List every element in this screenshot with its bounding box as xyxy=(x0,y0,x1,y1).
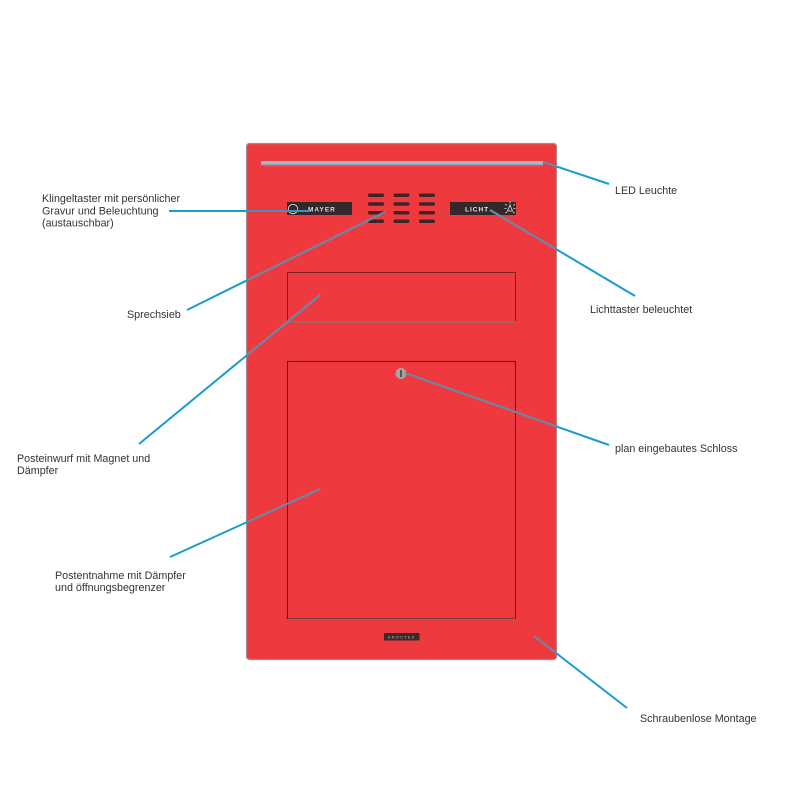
label: Klingeltaster: Gravur und Beleuchtung xyxy=(42,206,159,218)
brand plate xyxy=(384,633,420,640)
light button: LICHT xyxy=(465,206,489,214)
speaker grille xyxy=(368,194,435,223)
label: Postentnahme: und öffnungsbegrenzer xyxy=(55,582,166,594)
label: LED Leuchte: LED Leuchte xyxy=(615,185,677,197)
mail slot flap xyxy=(288,272,516,323)
label: Klingeltaster: (austauschbar) xyxy=(42,218,114,230)
mail removal door xyxy=(288,362,516,620)
leader line: light button xyxy=(490,210,635,296)
leader line: screwless mounting xyxy=(534,636,627,708)
leader line: speaker xyxy=(187,212,385,310)
label: plan eingebautes Schloss: plan eingebautes Schloss xyxy=(615,443,738,455)
doorbell button with engraving: MAYER xyxy=(308,206,336,214)
leader line: mail slot xyxy=(139,295,320,444)
doorbell button with engraving xyxy=(287,202,352,215)
panel: red mailbox front xyxy=(246,144,556,660)
light button xyxy=(450,202,516,215)
label: Sprechsieb: Sprechsieb xyxy=(127,309,181,321)
leader line: mail removal xyxy=(170,489,320,557)
label: Posteinwurf: Posteinwurf mit Magnet und xyxy=(17,453,150,465)
label: Postentnahme: Postentnahme mit Dämpfer xyxy=(55,570,186,582)
label: Schraubenlose Montage: Schraubenlose Montage xyxy=(640,713,757,725)
brand plate: KNOCTEK xyxy=(388,635,416,640)
label: Klingeltaster: Klingeltaster mit persönlicher xyxy=(42,193,180,205)
label: Posteinwurf: Dämpfer xyxy=(17,465,59,477)
leader line: doorbell xyxy=(169,210,310,212)
icon: flush lock xyxy=(396,368,406,379)
label: Lichttaster: Lichttaster beleuchtet xyxy=(590,304,692,316)
leader line: LED xyxy=(543,162,609,184)
leader line: lock xyxy=(405,373,609,445)
LED light strip xyxy=(261,161,543,166)
icon: light bulb xyxy=(504,202,516,213)
